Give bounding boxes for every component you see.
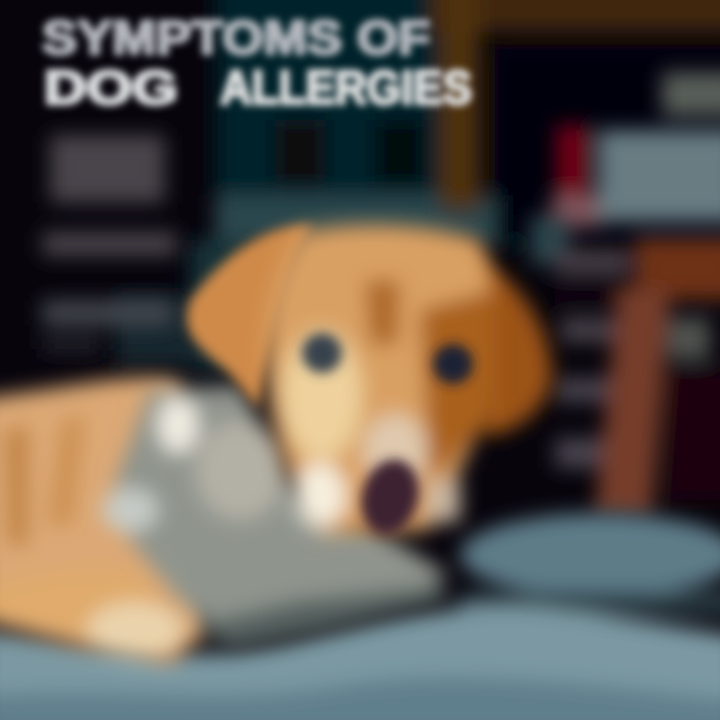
title: SYMPTOMS OF [42,12,430,65]
title [42,12,472,115]
furniture: shelf and chair [530,72,720,515]
title: ALLERGIES [220,62,472,115]
title: DOG [44,62,178,115]
dog left ear [186,225,312,408]
dog mouth [353,453,427,541]
dog right ear [440,250,552,435]
dog body [0,377,210,665]
dog chest fur [102,385,450,650]
dog eyes [302,333,473,384]
illegible body text blocks [42,135,177,352]
dog [0,224,552,665]
dog head [265,224,495,535]
bedding: plate and blanket [0,513,720,720]
